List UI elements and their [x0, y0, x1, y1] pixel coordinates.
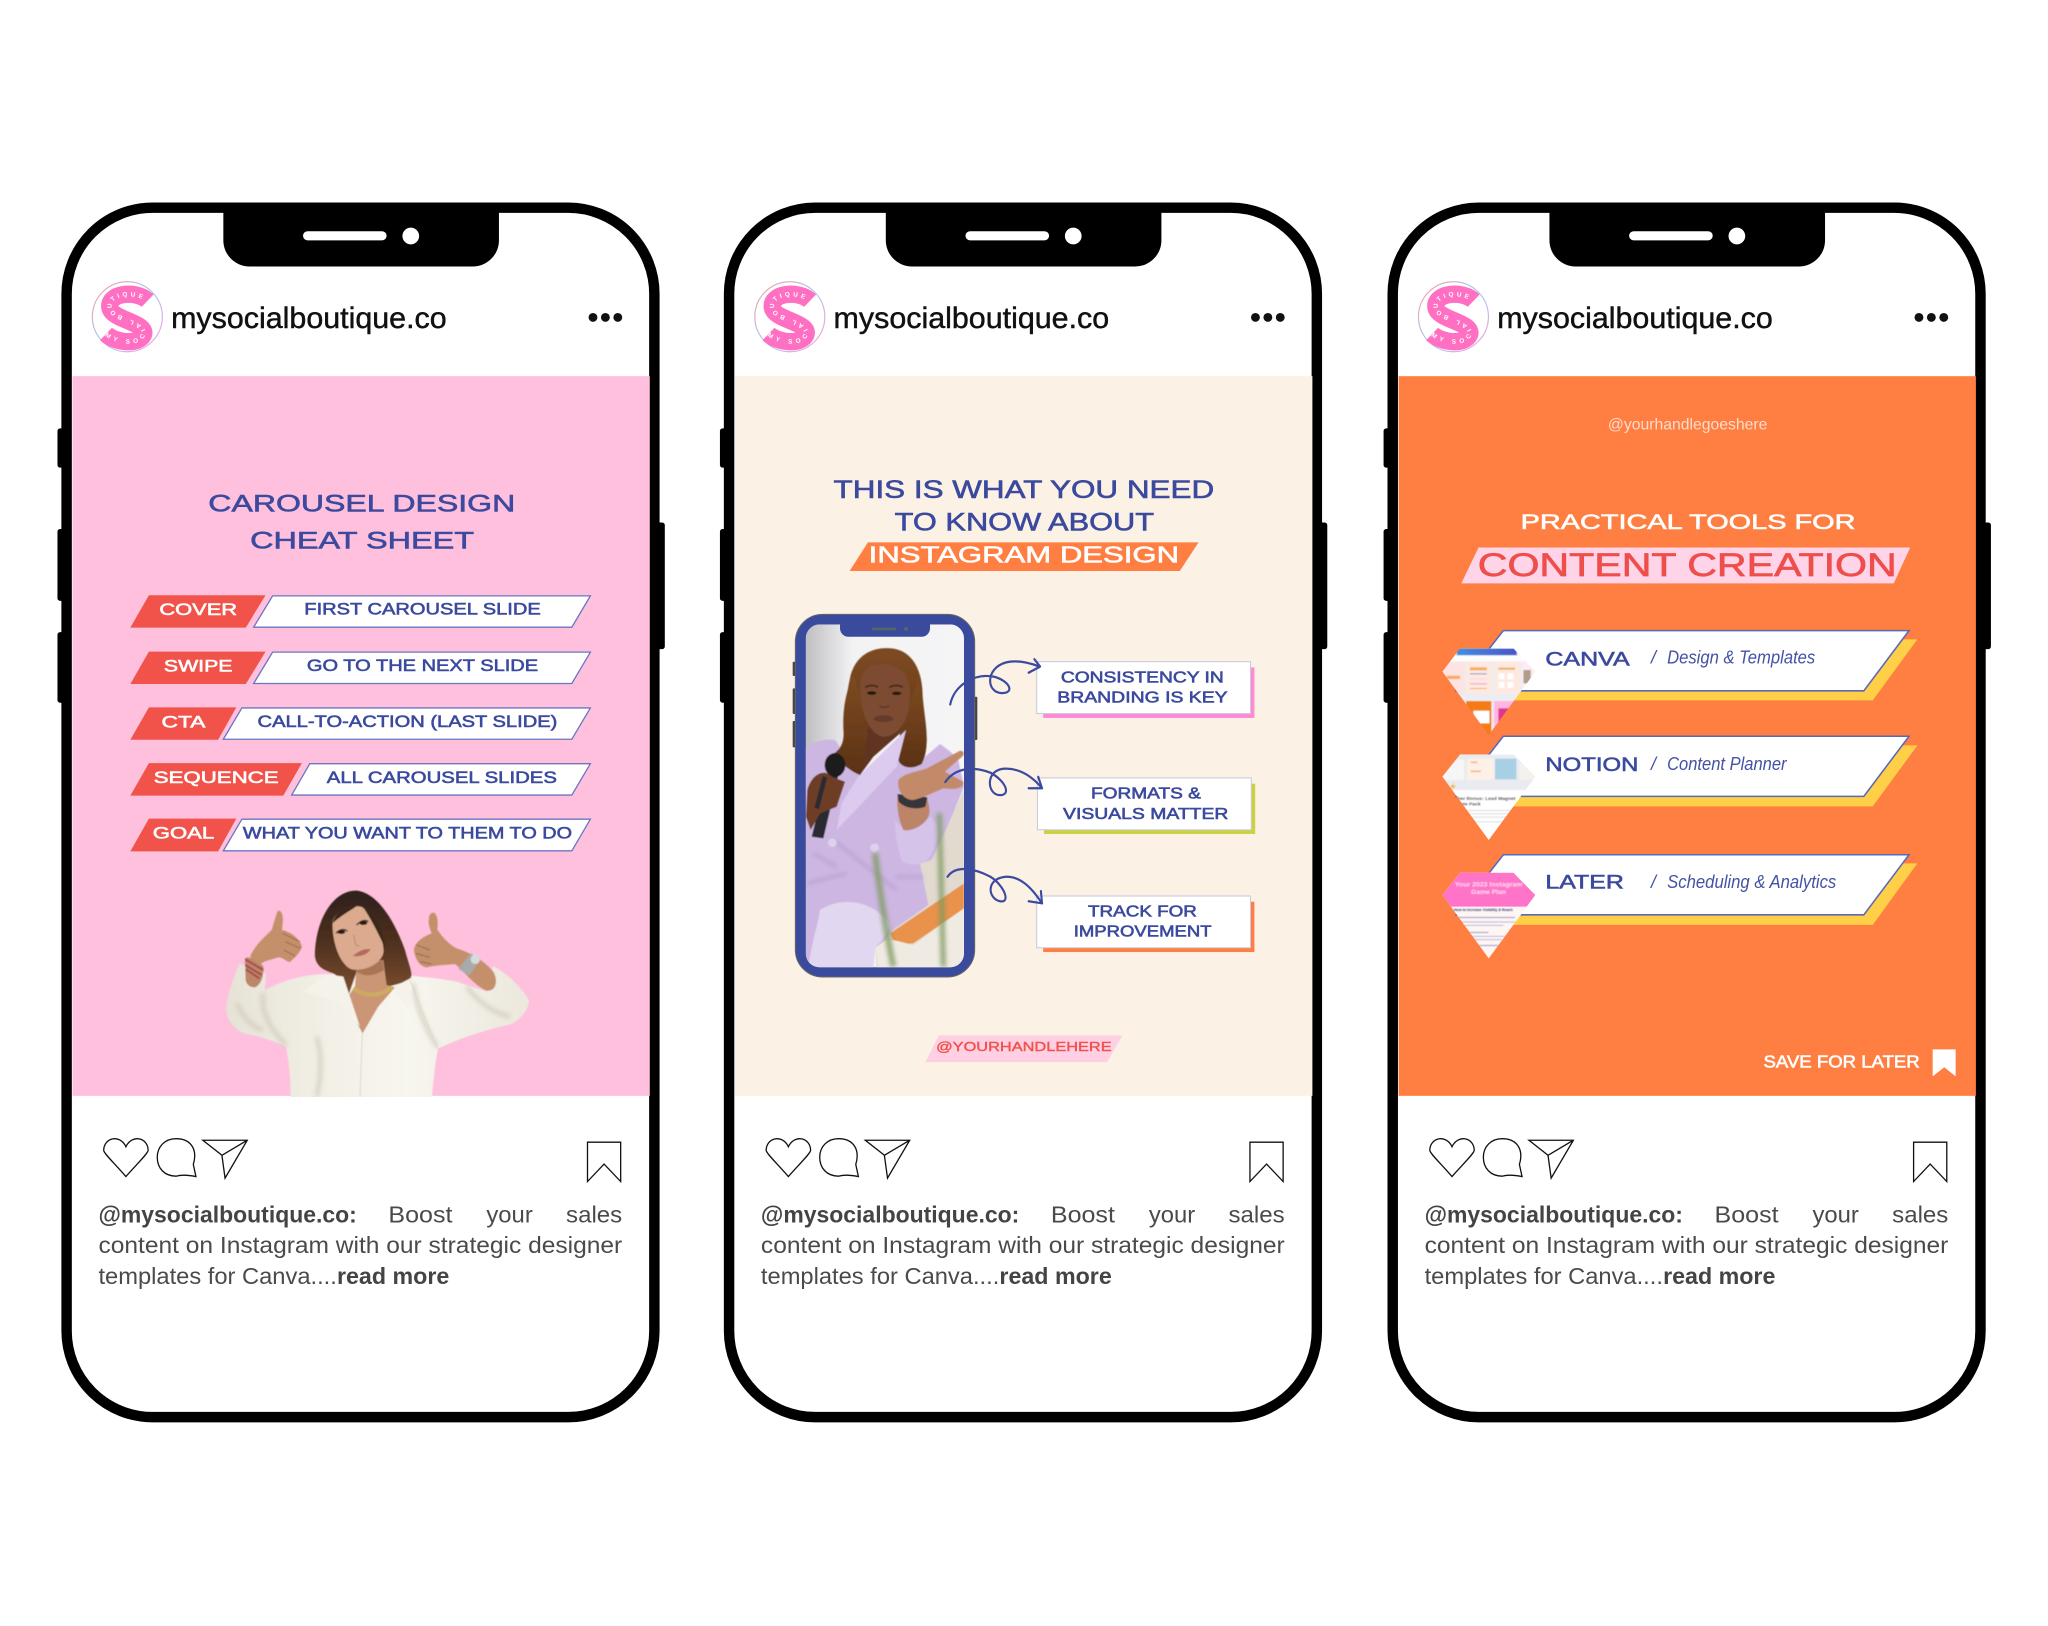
tool card: canva: Design & Templates: [1667, 648, 1815, 668]
account name: mysocialboutique.co: [171, 302, 447, 335]
row: sequence: ALL CAROUSEL SLIDES: [327, 768, 557, 787]
avatar logo: [754, 281, 826, 352]
caption text: sales: [1892, 1201, 1948, 1227]
card: track for improvement: TRACK FOR: [1088, 903, 1197, 920]
illustration: phone with speaker photo: [793, 614, 977, 977]
icon: heart: [104, 1139, 148, 1177]
phone mockup: carousel cheat sheet post: [57, 202, 665, 1422]
heading: practical tools for: PRACTICAL TOOLS FOR: [1521, 509, 1855, 534]
row: sequence: SEQUENCE: [154, 768, 279, 787]
caption text: read more: [1663, 1263, 1775, 1289]
handle banner: [925, 1035, 1122, 1062]
caption text: @mysocialboutique.co:: [98, 1201, 357, 1227]
menu dots: [1915, 313, 1948, 322]
icon: comment bubble: [820, 1139, 858, 1177]
menu dots: [1251, 313, 1285, 322]
icon: heart: [766, 1139, 811, 1177]
phone mockup: Instagram design post: [720, 202, 1328, 1422]
card: consistency in branding: BRANDING IS KEY: [1057, 689, 1228, 706]
avatar logo: [92, 281, 163, 352]
caption text: templates for Canva....: [761, 1263, 999, 1289]
caption text: templates for Canva....: [98, 1263, 337, 1289]
heading banner: content creation: CONTENT CREATION: [1478, 547, 1897, 583]
save for later label: SAVE FOR LATER: [1764, 1052, 1920, 1072]
card: formats and visuals: FORMATS &: [1091, 785, 1202, 802]
caption text: your: [1149, 1201, 1195, 1227]
row: swipe: [130, 652, 590, 684]
avatar logo: MY SOCIAL BOUTIQUE: [768, 292, 808, 344]
tool card: notion: Content Planner: [1667, 754, 1787, 774]
row: goal: [130, 819, 590, 851]
icon: send plane: [203, 1140, 247, 1178]
phone frame: [1384, 208, 1991, 1417]
card: track for improvement: IMPROVEMENT: [1074, 923, 1212, 940]
infographic canvas: three phone mockups: [57, 202, 1991, 1422]
row: cover: FIRST CAROUSEL SLIDE: [304, 600, 541, 619]
icon: bookmark: [587, 1142, 621, 1182]
handle banner: @YOURHANDLEHERE: [936, 1039, 1112, 1054]
gem thumbnail: notion: Template Pack: [1446, 801, 1481, 807]
card: consistency in branding: CONSISTENCY IN: [1061, 669, 1224, 686]
caption text: [98, 1201, 622, 1289]
icon: bookmark: [1250, 1142, 1283, 1182]
heading banner: instagram design: [850, 541, 1198, 571]
handle text: @yourhandlegoeshere: [1608, 417, 1768, 434]
tool card: later: LATER: [1545, 872, 1624, 894]
heading: carousel design cheat sheet: [208, 491, 515, 554]
phone frame: [720, 208, 1327, 1417]
account name: mysocialboutique.co: [1497, 302, 1773, 335]
gem thumbnail: later: How to Increase Visibility & Reach: [1454, 907, 1513, 912]
caption text: content on Instagram with our strategic designer: [98, 1232, 622, 1258]
tool card: canva: CANVA: [1545, 648, 1631, 670]
panel: cream slide background: [735, 376, 1312, 1096]
tool card: later: [1456, 855, 1917, 925]
caption text: content on Instagram with our strategic designer: [761, 1232, 1285, 1258]
caption text: [761, 1201, 1285, 1289]
caption text: read more: [337, 1263, 449, 1289]
caption text: sales: [1229, 1201, 1285, 1227]
row: cta: [130, 707, 590, 740]
gem thumbnail: notion: Member Bonus: Lead Magnet: [1446, 796, 1516, 802]
caption text: your: [1813, 1201, 1859, 1227]
account name: mysocialboutique.co: [834, 302, 1109, 335]
tool card: later: /: [1649, 872, 1658, 892]
heading banner: instagram design: INSTAGRAM DESIGN: [869, 541, 1179, 567]
caption text: Boost: [1715, 1201, 1779, 1227]
row: swipe: SWIPE: [164, 657, 232, 676]
icon: send plane: [865, 1140, 910, 1178]
gem thumbnail: canva: [1442, 648, 1536, 735]
tool card: canva: /: [1649, 648, 1658, 668]
row: goal: WHAT YOU WANT TO THEM TO DO: [243, 823, 572, 842]
tool card: canva: [1456, 631, 1917, 700]
row: goal: GOAL: [153, 824, 214, 843]
caption text: sales: [566, 1201, 622, 1227]
card: consistency in branding: [1037, 662, 1254, 718]
heading: carousel design cheat sheet: CAROUSEL DESIGN: [208, 491, 515, 518]
caption text: your: [486, 1201, 533, 1227]
caption text: @mysocialboutique.co:: [761, 1201, 1019, 1227]
card: formats and visuals: VISUALS MATTER: [1063, 806, 1228, 823]
caption text: Boost: [388, 1201, 453, 1227]
gem thumbnail: later: [1440, 872, 1540, 960]
card: formats and visuals: [1037, 778, 1255, 834]
tool card: notion: [1456, 736, 1917, 806]
icon: heart: [1430, 1139, 1474, 1177]
heading: this is what you need to know about: TO KNOW ABOUT: [895, 510, 1154, 537]
tool card: notion: /: [1649, 754, 1658, 774]
tool card: later: Scheduling & Analytics: [1667, 872, 1836, 892]
icon: white bookmark: [1933, 1049, 1956, 1076]
gem thumbnail: later: Your 2023 Instagram: [1455, 883, 1522, 889]
row: swipe: GO TO THE NEXT SLIDE: [307, 656, 538, 675]
caption text: [1425, 1201, 1949, 1289]
row: cover: COVER: [159, 600, 237, 619]
avatar logo: MY SOCIAL BOUTIQUE: [105, 292, 146, 344]
row: cta: CTA: [162, 712, 206, 731]
panel: pink slide background: [72, 376, 650, 1096]
heading: this is what you need to know about: THIS IS WHAT YOU NEED: [834, 477, 1214, 504]
row: cta: CALL-TO-ACTION (LAST SLIDE): [258, 712, 557, 731]
caption text: read more: [999, 1263, 1112, 1289]
tool card: notion: NOTION: [1545, 754, 1638, 776]
panel: orange slide background: [1399, 376, 1976, 1096]
heading: this is what you need to know about: [834, 477, 1214, 537]
arrow: to formats card: [945, 769, 1042, 795]
heading: carousel design cheat sheet: CHEAT SHEET: [250, 527, 475, 554]
phone mockup: content creation tools post: [1384, 202, 1991, 1422]
card: track for improvement: [1037, 896, 1254, 952]
gem thumbnail: notion: [1440, 753, 1540, 842]
icon: bookmark: [1914, 1142, 1947, 1182]
row: cover: [130, 595, 590, 628]
icon: send plane: [1529, 1140, 1573, 1178]
arrow: to track card: [948, 869, 1042, 903]
row: sequence: [130, 763, 590, 796]
menu dots: [589, 313, 622, 322]
avatar logo: MY SOCIAL BOUTIQUE: [1431, 292, 1472, 344]
icon: comment bubble: [1483, 1139, 1522, 1177]
caption text: Boost: [1051, 1201, 1115, 1227]
gem thumbnail: later: Game Plan: [1471, 890, 1506, 896]
caption text: content on Instagram with our strategic designer: [1425, 1232, 1949, 1258]
caption text: templates for Canva....: [1425, 1263, 1663, 1289]
caption text: @mysocialboutique.co:: [1425, 1201, 1683, 1227]
phone frame: [57, 208, 665, 1417]
arrow: to branding card: [950, 659, 1040, 705]
icon: comment bubble: [157, 1139, 196, 1177]
avatar logo: [1418, 281, 1489, 352]
photo: woman giving thumbs up: [226, 891, 529, 1100]
